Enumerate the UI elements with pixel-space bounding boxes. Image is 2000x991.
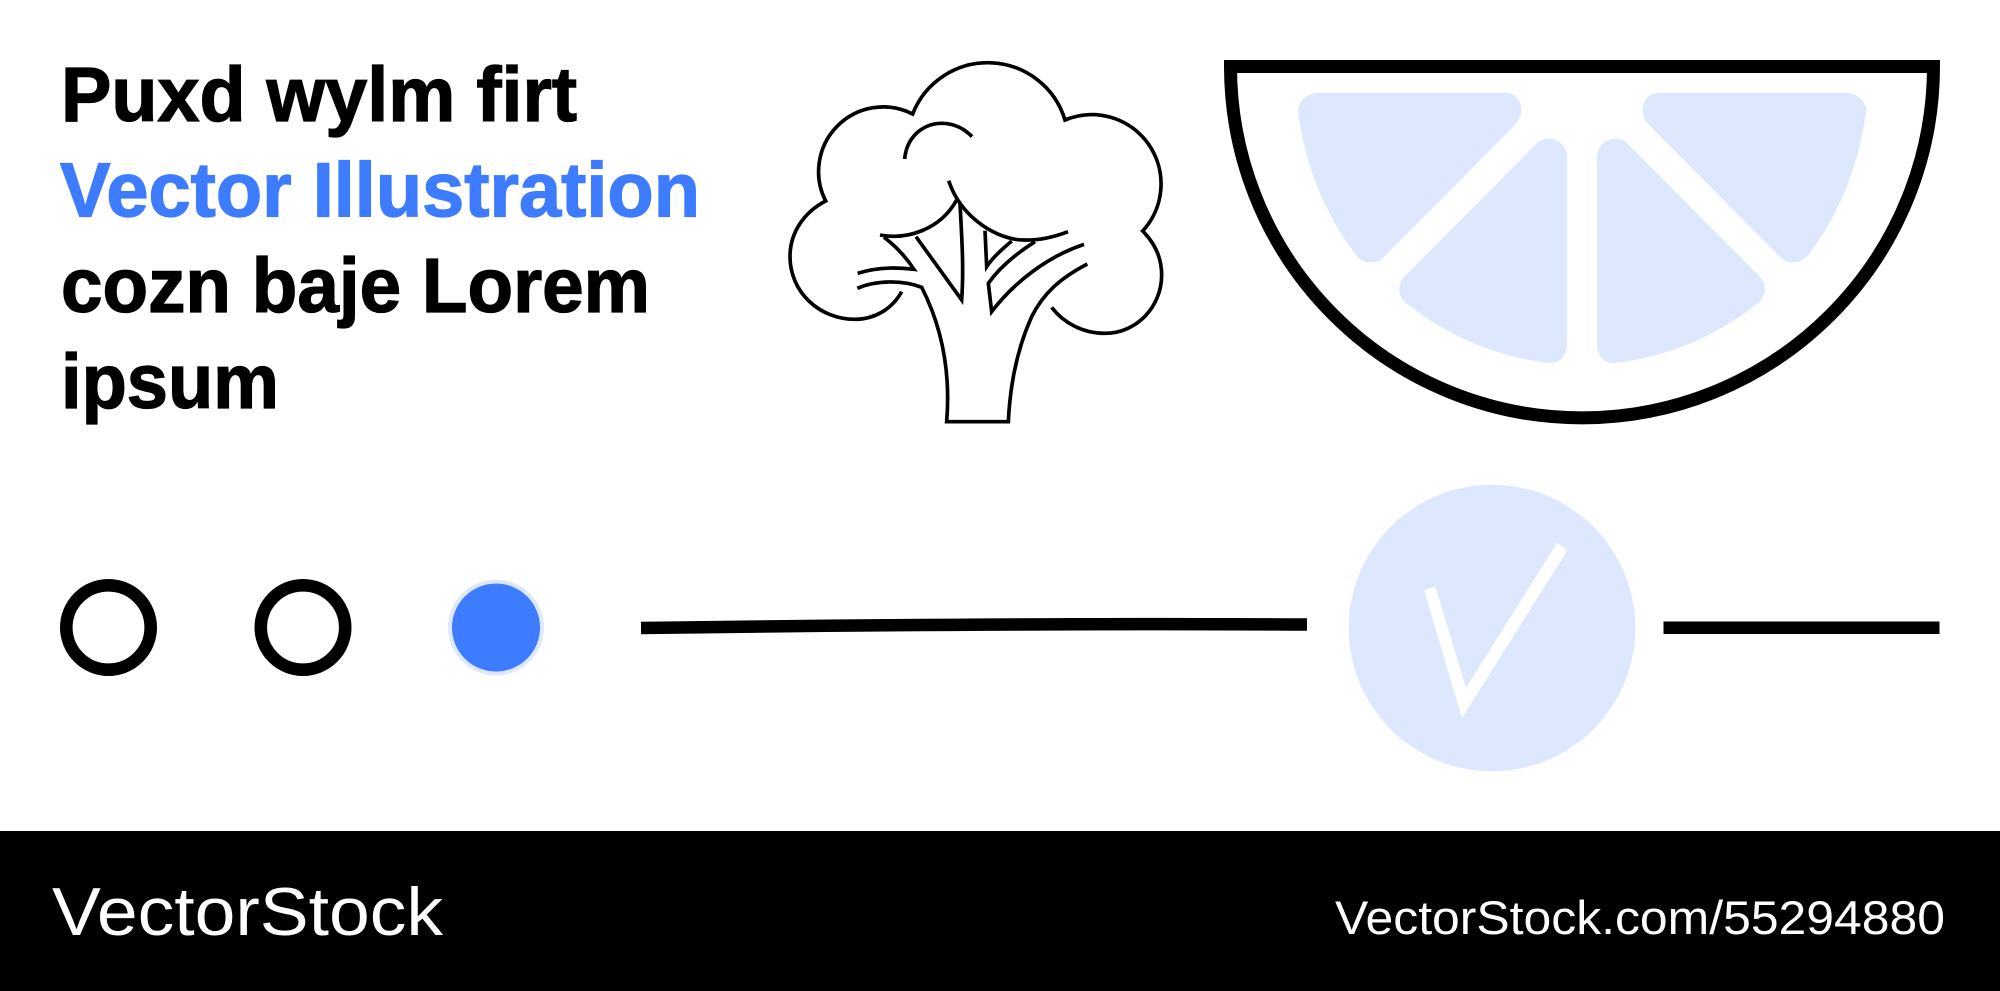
title: Puxd wylm firt — [61, 52, 577, 138]
progress dot 1 — [66, 585, 151, 670]
connector line right — [1664, 622, 1940, 634]
title: Vector Illustration — [60, 148, 700, 234]
progress dot 2 — [261, 585, 345, 670]
icon: check circle — [1349, 485, 1635, 771]
title: cozn baje Lorem — [61, 243, 650, 329]
footer bar — [0, 831, 2000, 991]
title — [60, 52, 700, 425]
icon: broccoli — [790, 63, 1162, 422]
citrus rind — [1230, 66, 1934, 418]
icon: citrus slice — [1230, 66, 1934, 418]
citrus segments — [1298, 93, 1866, 363]
footer url: VectorStock.com/55294880 — [1335, 891, 1945, 944]
footer logo: VectorStock — [52, 874, 444, 950]
progress dot 3 active — [450, 582, 542, 674]
connector line left — [641, 624, 1307, 628]
title: ipsum — [61, 339, 279, 425]
